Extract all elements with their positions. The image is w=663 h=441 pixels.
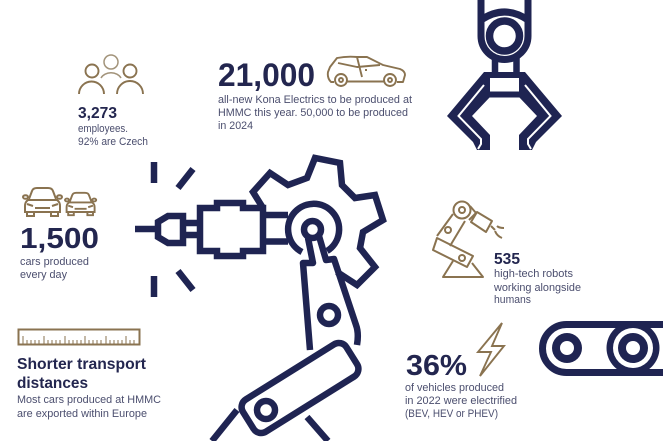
employees text: employees. (78, 123, 128, 135)
lower base lines (212, 410, 328, 441)
robots text: working alongside (493, 282, 581, 294)
employees text (78, 123, 148, 148)
lower arm (238, 340, 362, 436)
Kona text: HMMC this year. 50,000 to be produced (218, 107, 408, 119)
Kona text: in 2024 (218, 120, 253, 132)
gripper left claw (447, 72, 490, 150)
sparks (154, 162, 193, 297)
cars per day text: every day (20, 269, 67, 281)
lower arm pivot (257, 401, 275, 419)
robot gripper (447, 0, 562, 150)
Kona text (218, 94, 412, 132)
main robot arm (135, 158, 383, 441)
gripper neck (495, 57, 516, 75)
transport block (17, 330, 161, 420)
stat: 3,273: 3,273 (78, 105, 117, 122)
Kona text: all-new Kona Electrics to be produced at (218, 94, 412, 106)
electrified text: of vehicles produced (405, 382, 504, 394)
upper arm pivot (320, 306, 338, 324)
drill tool (135, 216, 200, 243)
arm head block (200, 203, 263, 256)
transport text: Most cars produced at HMMC (17, 394, 161, 406)
stat: 36%: 36% (406, 350, 467, 382)
stat: 535: 535 (494, 251, 520, 268)
electrified text (405, 382, 517, 420)
robots text (493, 268, 581, 306)
icon: car side view (328, 57, 405, 86)
Kona Electric block (218, 57, 412, 132)
gripper bracket (487, 75, 522, 94)
icon: lightning bolt (478, 323, 504, 376)
joint hub (304, 221, 321, 238)
electrified text: (BEV, HEV or PHEV) (405, 408, 498, 420)
cars per day text (20, 256, 89, 281)
gripper ring (490, 21, 520, 51)
gripper right claw (519, 72, 562, 150)
upper arm (303, 236, 358, 350)
conveyor (542, 322, 663, 374)
robots text: humans (494, 294, 531, 306)
icon: large car front (23, 188, 62, 216)
first roller (552, 333, 582, 363)
heading: shorter transport distances: Shorter transport (17, 356, 147, 373)
employees block (78, 55, 148, 148)
icon: ruler (18, 330, 140, 344)
transport text: are exported within Europe (17, 408, 147, 420)
employees text: 92% are Czech (78, 136, 148, 148)
joint ring (288, 204, 339, 252)
robots block (433, 202, 581, 306)
cars per day block (20, 188, 99, 281)
electrified block (405, 323, 517, 420)
second roller (606, 322, 660, 374)
stat: 1,500: 1,500 (20, 223, 99, 255)
heading: shorter transport distances (17, 356, 147, 392)
gripper housing (481, 0, 528, 59)
transport text (17, 394, 161, 420)
cars per day text: cars produced (20, 256, 89, 268)
stat: 21,000: 21,000 (218, 57, 315, 93)
gear (253, 158, 383, 285)
icon: small car front (65, 193, 96, 215)
conveyor belt (542, 324, 663, 372)
electrified text: in 2022 were electrified (405, 395, 517, 407)
robots text: high-tech robots (494, 268, 573, 280)
connector (263, 215, 288, 242)
icon: people (79, 55, 143, 94)
icon: small robot arm (433, 202, 504, 277)
heading: shorter transport distances: distances (17, 375, 88, 392)
